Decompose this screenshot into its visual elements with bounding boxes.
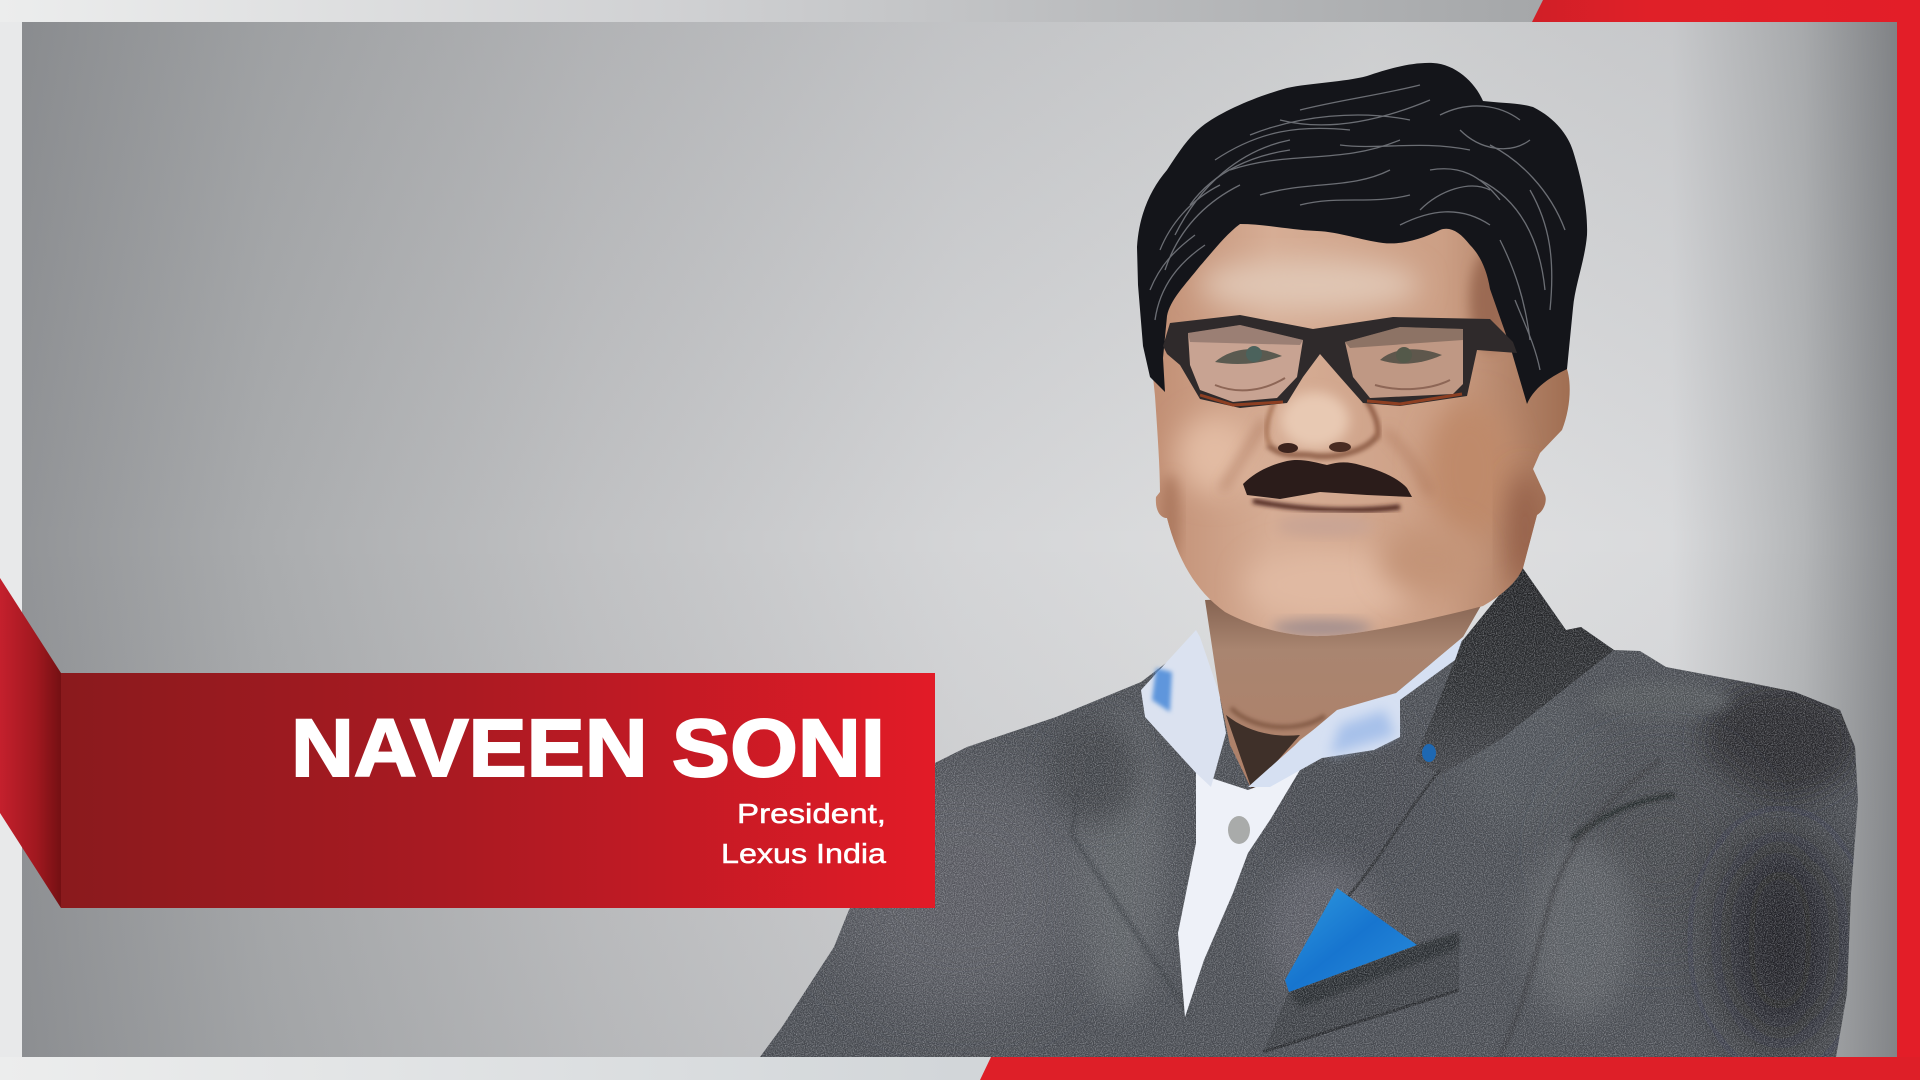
lapel pin — [1422, 744, 1436, 762]
shirt left collar — [1141, 630, 1226, 787]
ribbon fold at left — [0, 578, 61, 908]
blue pocket square — [1285, 888, 1417, 992]
shirt body — [1178, 770, 1300, 1017]
neck — [1205, 590, 1490, 790]
shirt right collar — [1248, 637, 1463, 787]
face — [1145, 200, 1570, 636]
mouth — [1253, 501, 1400, 536]
shirt button — [1228, 816, 1250, 844]
name heading: NAVEEN SONI — [291, 703, 885, 794]
eyeglasses — [1163, 315, 1517, 408]
red frame: top right strip — [1532, 0, 1920, 22]
eyes — [1215, 346, 1450, 390]
nose — [1222, 392, 1430, 495]
red frame: right strip — [1897, 0, 1920, 1080]
portrait illustration — [740, 63, 1880, 1070]
lens tint — [1188, 325, 1463, 402]
moustache — [1243, 460, 1412, 499]
pocket — [1263, 932, 1459, 1052]
red frame: bottom strip — [980, 1057, 1920, 1080]
jacket — [740, 550, 1880, 1070]
job title line 2: Lexus India — [721, 838, 886, 869]
neck shadow and fold — [1226, 708, 1325, 790]
glasses lower rim tint — [1200, 394, 1462, 405]
hair grey strands — [1150, 85, 1565, 370]
hair — [1137, 63, 1587, 404]
red name band — [61, 673, 935, 908]
jacket collar dark edge — [1415, 567, 1614, 775]
job title line 1: President, — [737, 798, 886, 829]
face shading — [1160, 250, 1543, 637]
